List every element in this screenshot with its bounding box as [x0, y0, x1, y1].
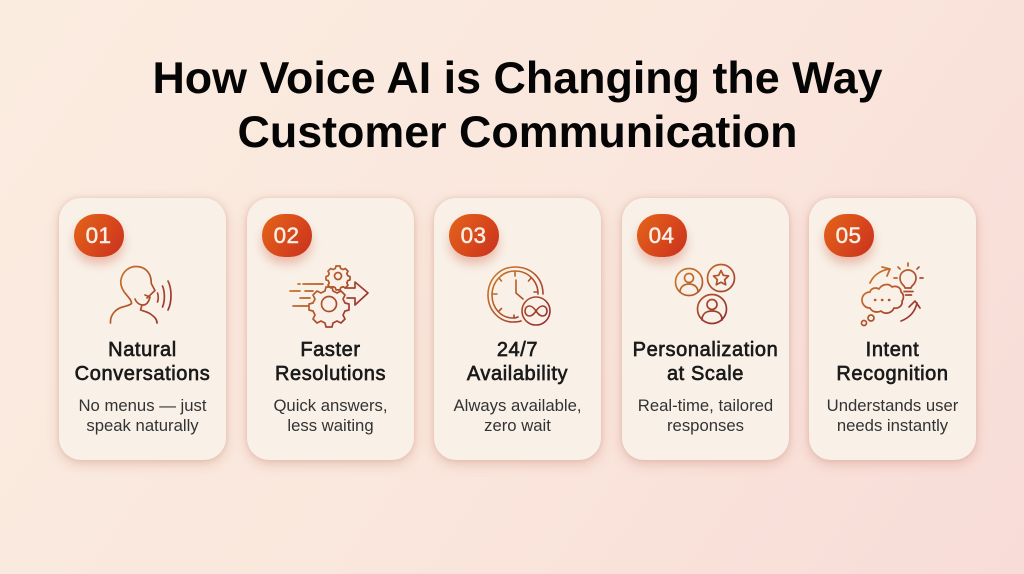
description — [638, 396, 773, 434]
heading: Recognition — [836, 362, 949, 384]
description: Quick answers, — [273, 396, 388, 415]
panel: 24/7 Availability — [434, 198, 601, 460]
description: needs instantly — [837, 416, 948, 434]
description — [454, 396, 582, 434]
description: speak naturally — [86, 416, 199, 434]
description: responses — [667, 416, 744, 434]
number badge 04 — [636, 214, 686, 257]
panel: Faster Resolutions — [247, 198, 414, 460]
number badge 01: 01 — [86, 223, 111, 248]
panel: Intent Recognition — [809, 198, 976, 460]
description: zero wait — [484, 416, 551, 434]
icon: clock with infinity — [487, 266, 551, 326]
heading — [75, 339, 210, 384]
heading: Intent — [866, 339, 919, 361]
heading — [466, 339, 568, 384]
number badge 05: 05 — [836, 223, 861, 248]
icon: thought cloud and lightbulb — [860, 262, 924, 326]
heading: at Scale — [667, 362, 744, 384]
number badge 02: 02 — [274, 223, 299, 248]
heading — [275, 339, 386, 384]
heading: Resolutions — [275, 362, 386, 384]
description: Always available, — [454, 396, 582, 415]
description — [78, 396, 206, 434]
description: Understands user — [827, 396, 958, 415]
number badge 03: 03 — [461, 223, 486, 248]
heading — [633, 339, 778, 384]
description: less waiting — [287, 416, 374, 434]
number badge 01 — [74, 214, 124, 257]
icon: user profiles and star — [674, 264, 736, 324]
number badge 02 — [262, 214, 312, 257]
panel: Natural Conversations — [59, 198, 226, 460]
heading: Availability — [467, 362, 568, 384]
number badge 05 — [824, 214, 874, 257]
panel: Personalization at Scale — [622, 198, 789, 460]
number badge 03 — [448, 214, 498, 257]
description: No menus — just — [78, 396, 206, 415]
heading: 24/7 — [497, 339, 538, 361]
heading: Personalization — [633, 339, 778, 361]
title — [152, 52, 883, 156]
heading: Faster — [300, 339, 361, 361]
title: How Voice AI is Changing the Way — [152, 52, 883, 102]
icon: speaking head — [110, 266, 172, 324]
heading — [836, 339, 949, 384]
heading: Natural — [108, 339, 177, 361]
heading: Conversations — [75, 362, 210, 384]
description — [827, 396, 958, 434]
icon: gears with arrow — [289, 265, 369, 328]
description: Real-time, tailored — [638, 396, 773, 415]
number badge 04: 04 — [649, 223, 674, 248]
description — [273, 396, 388, 434]
title: Customer Communication — [237, 106, 798, 156]
